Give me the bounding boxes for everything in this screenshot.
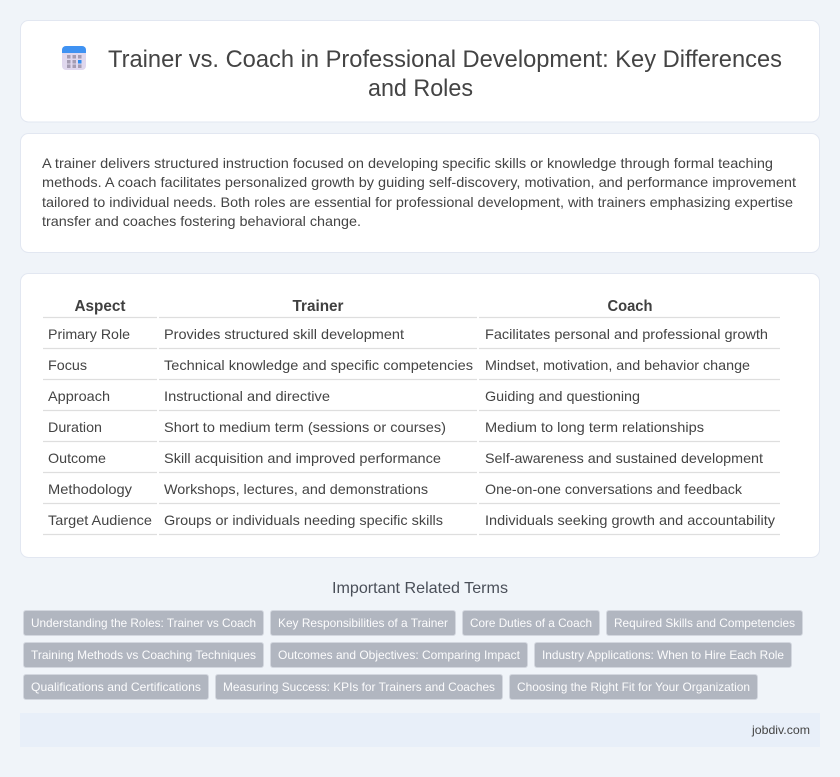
row: target audience: Individuals seeking growth and accountability <box>485 512 775 528</box>
row: approach: Approach <box>48 388 110 404</box>
row: focus <box>48 357 750 373</box>
tag: industry applications <box>534 642 792 668</box>
tag: key responsibilities: Key Responsibilities of a Trainer <box>278 616 448 630</box>
intro paragraph: tailored to individual needs. Both roles are essential for professional development, with trainers emphasizing expertise <box>42 194 793 210</box>
row: methodology: One-on-one conversations and feedback <box>485 481 743 497</box>
table header: Coach <box>608 298 652 315</box>
tag: qualifications <box>24 674 208 700</box>
row: duration: Short to medium term (sessions or courses) <box>164 419 446 435</box>
comparison table panel <box>20 274 820 558</box>
tag: core duties <box>462 610 600 636</box>
intro paragraph: methods. A coach facilitates personalized growth by guiding self-discovery, motivation, and performance improvement <box>42 174 796 190</box>
intro paragraph <box>42 155 796 229</box>
tag: outcomes and objectives <box>270 642 528 668</box>
header panel <box>20 20 820 122</box>
row: approach: Instructional and directive <box>164 388 330 404</box>
table header <box>74 298 652 315</box>
row: duration: Medium to long term relationships <box>485 419 704 435</box>
icon: calendar <box>62 46 86 70</box>
tag: key responsibilities <box>270 610 456 636</box>
row: methodology: Workshops, lectures, and demonstrations <box>164 481 428 497</box>
table header: Aspect <box>74 298 126 315</box>
row: duration <box>48 419 704 435</box>
table header: Trainer <box>292 298 344 315</box>
row: outcome: Outcome <box>48 450 106 466</box>
row: outcome: Self-awareness and sustained development <box>485 450 763 466</box>
intro text panel <box>20 134 820 252</box>
row: focus: Mindset, motivation, and behavior change <box>485 357 750 373</box>
row: outcome: Skill acquisition and improved performance <box>164 450 441 466</box>
tag: choosing the right fit: Choosing the Right Fit for Your Organization <box>517 680 750 694</box>
row: methodology <box>48 481 743 497</box>
tag: understanding the roles <box>24 610 264 636</box>
tag: qualifications: Qualifications and Certifications <box>31 680 201 694</box>
footer source text: jobdiv.com <box>751 723 810 737</box>
row: approach <box>48 388 640 404</box>
intro paragraph: A trainer delivers structured instruction focused on developing specific skills or knowledge through formal teaching <box>42 155 773 171</box>
title: Trainer vs. Coach in Professional Development: Key Differences <box>108 46 782 73</box>
row: duration: Duration <box>48 419 102 435</box>
related terms tags <box>24 610 802 700</box>
title <box>108 46 782 102</box>
row: target audience: Groups or individuals needing specific skills <box>164 512 443 528</box>
tag: training methods <box>24 642 264 668</box>
tag: core duties: Core Duties of a Coach <box>470 616 592 630</box>
row: primary role: Provides structured skill development <box>164 326 404 342</box>
row: primary role: Primary Role <box>48 326 130 342</box>
related terms heading: Important Related Terms <box>332 580 508 597</box>
tag: measuring success: Measuring Success: KPIs for Trainers and Coaches <box>223 680 495 694</box>
row: focus: Focus <box>48 357 87 373</box>
tag: training methods: Training Methods vs Coaching Techniques <box>31 648 256 662</box>
row: primary role <box>48 326 768 342</box>
tag: choosing the right fit <box>510 674 758 700</box>
intro paragraph: transfer and coaches fostering behavioral change. <box>42 213 361 229</box>
tag: measuring success <box>216 674 502 700</box>
tag: outcomes and objectives: Outcomes and Objectives: Comparing Impact <box>278 648 521 662</box>
row: focus: Technical knowledge and specific competencies <box>164 357 473 373</box>
footer <box>20 713 820 747</box>
row: primary role: Facilitates personal and professional growth <box>485 326 768 342</box>
title: and Roles <box>368 75 473 102</box>
row: outcome <box>48 450 763 466</box>
tag: understanding the roles: Understanding the Roles: Trainer vs Coach <box>31 616 256 630</box>
row: approach: Guiding and questioning <box>485 388 640 404</box>
tag: required skills: Required Skills and Competencies <box>614 616 795 630</box>
tag: industry applications: Industry Applications: When to Hire Each Role <box>542 648 784 662</box>
row: methodology: Methodology <box>48 481 132 497</box>
row: target audience: Target Audience <box>48 512 152 528</box>
tag: required skills <box>606 610 802 636</box>
row: target audience <box>48 512 775 528</box>
